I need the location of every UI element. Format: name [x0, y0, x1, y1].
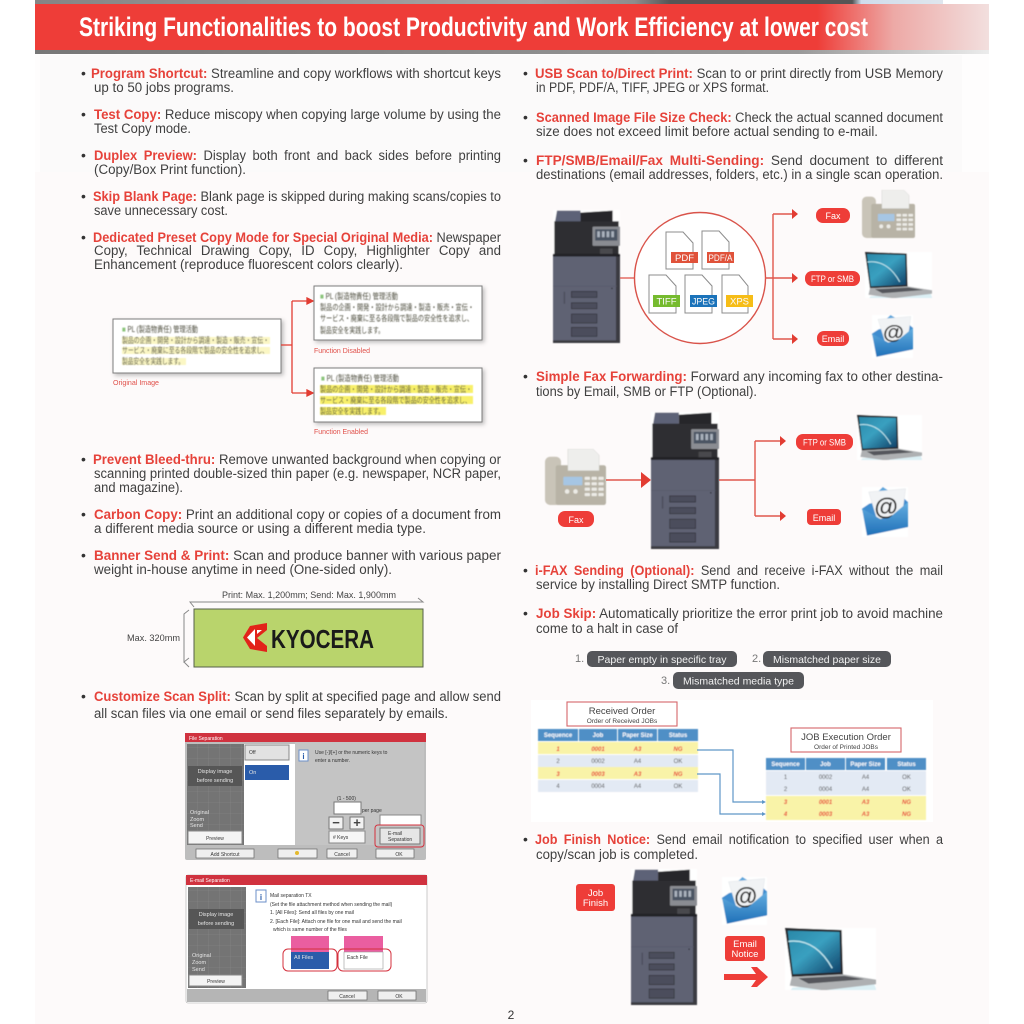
screenshot: file separation — [185, 733, 426, 860]
table: job execution order: A3 — [861, 800, 870, 806]
instructions: i — [260, 893, 262, 902]
feature: scanned image file size — [523, 109, 943, 139]
button bar: Add Shortcut — [211, 852, 240, 858]
preview pane — [187, 744, 244, 845]
preview pane: Original — [190, 810, 209, 816]
feature: customize scan split: Customize Scan Split: Scan by split at specified page and allow send — [94, 689, 501, 704]
feature: usb scan: in PDF, PDF/A, TIFF, JPEG or XPS format. — [536, 80, 769, 95]
feature: usb scan — [523, 65, 943, 95]
table: job execution order: Job — [820, 762, 831, 768]
label: job finish: Job — [588, 888, 603, 899]
settings pane: − — [332, 815, 340, 830]
table: received order: Status — [669, 733, 688, 739]
feature: test copy: Test Copy: Reduce miscopy when copying large volume by using the — [94, 107, 501, 122]
pill: ftp or smb: FTP or SMB — [803, 438, 846, 448]
banner print size label: Print: Max. 1,200mm; Send: Max. 1,900mm — [222, 590, 396, 601]
table: received order: OK — [674, 759, 682, 765]
condition 1 — [575, 651, 737, 667]
table: received order: 0004 — [591, 784, 605, 790]
table: received order: A3 — [633, 772, 642, 778]
feature: program shortcut: Program Shortcut: Streamline and copy workflows with shortcut keys — [91, 66, 501, 81]
table: job execution order: Paper Size — [850, 762, 881, 768]
dimension brackets — [184, 598, 423, 667]
title banner — [35, 0, 989, 54]
feature: simple fax forwarding — [523, 368, 943, 399]
button bar: Cancel — [339, 994, 355, 1000]
instructions — [256, 890, 402, 933]
feature: simple fax forwarding: Simple Fax Forwarding: Forward any incoming fax to other destina- — [536, 369, 943, 384]
feature: test copy: • — [81, 106, 86, 122]
pill: email: Email — [822, 334, 844, 344]
diagram: job finish notice — [576, 866, 880, 1008]
label: received order — [567, 702, 677, 726]
feature: multi-sending: FTP/SMB/Email/Fax Multi-Sending: Send document to different — [536, 153, 943, 168]
table: job execution order: 0001 — [819, 800, 833, 806]
feature: dedicated preset copy mode: Enhancement (reproduce fluorescent colors clearly). — [94, 257, 403, 272]
kyocera logo — [243, 623, 374, 654]
table: received order: OK — [674, 784, 682, 790]
label: job execution order — [791, 728, 901, 752]
feature: dedicated preset copy mode: Copy, Technical Drawing Copy, ID Copy, Highlighter Copy and — [94, 243, 501, 258]
feature: dedicated preset copy mode: • — [81, 229, 86, 245]
on off options: Off — [249, 750, 256, 756]
pill: fax — [558, 511, 594, 527]
feature: scanned image file size: Scanned Image File Size Check: Check the actual scanned document — [536, 110, 943, 125]
icon: laptop — [862, 249, 935, 303]
file icon: TIFF: TIFF — [656, 296, 677, 308]
image box: function enabled: ■ PL (製造物責任) 管理活動 — [321, 373, 399, 383]
feature: i-fax sending: • — [523, 562, 528, 578]
table: job execution order: A3 — [861, 812, 870, 818]
pill: email — [817, 331, 849, 346]
table: job execution order: Status — [897, 762, 916, 768]
caption: function enabled: Function Enabled — [314, 427, 368, 436]
preview pane: Preview — [206, 836, 224, 842]
table: job execution order: 0002 — [819, 775, 833, 781]
pill: email — [807, 509, 841, 525]
image box: original: ■ PL (製造物責任) 管理活動 — [122, 324, 198, 334]
label: job finish — [576, 884, 615, 911]
option buttons — [283, 936, 391, 971]
pill: fax: Fax — [568, 515, 584, 525]
diagram: fluorescent highlight comparison — [113, 286, 482, 436]
feature: job skip: Job Skip: Automatically prioritize the error print job to avoid machine — [536, 606, 943, 621]
diagram: banner size — [127, 590, 423, 667]
connectors between tables — [697, 750, 766, 816]
button bar — [187, 989, 426, 1002]
banner height label: Max. 320mm — [127, 633, 180, 644]
feature: customize scan split: • — [81, 688, 86, 704]
label: job execution order: Order of Printed JOBs — [814, 744, 879, 751]
feature: prevent bleed-thru — [81, 451, 501, 495]
table: received order: NG — [674, 772, 683, 778]
diagram: fax forwarding — [545, 409, 925, 552]
button bar — [196, 849, 414, 858]
file icon: PDF: PDF — [675, 253, 694, 264]
feature: job finish notice: • — [523, 831, 528, 847]
feature: i-fax sending: service by installing Direct SMTP function. — [536, 577, 780, 592]
image box: function enabled: サービス・廃棄に至る各段階で製品の安全性を追求し、 — [320, 395, 471, 405]
feature: dedicated preset copy mode — [81, 229, 501, 272]
caption: function disabled: Function Disabled — [314, 346, 370, 355]
feature: prevent bleed-thru: Prevent Bleed-thru: Remove unwanted background when copying or — [93, 452, 501, 467]
feature: job finish notice: Job Finish Notice: Send email notification to specified user when a — [535, 832, 943, 847]
image box: function enabled — [314, 368, 482, 422]
image box: function enabled: 製品の企画・開発・設計から調達・製造・販売・宣伝・ — [320, 384, 472, 394]
file icon: XPS: XPS — [730, 296, 749, 308]
image box: function disabled: ■ PL (製造物責任) 管理活動 — [320, 291, 398, 301]
feature: i-fax sending: i-FAX Sending (Optional): Send and receive i-FAX without the mail — [535, 563, 943, 578]
table: job execution order: 0004 — [819, 787, 833, 793]
settings pane: i — [302, 752, 305, 761]
label: email notice: Email — [733, 939, 757, 950]
icon: email envelope — [861, 484, 909, 539]
feature: banner send and print: • — [81, 547, 86, 563]
feature: job skip — [523, 605, 943, 636]
right column features — [523, 65, 943, 862]
job order tables — [531, 700, 933, 822]
connector: printer to circle — [620, 277, 635, 279]
feature: customize scan split — [81, 688, 501, 721]
feature: skip blank page: • — [81, 188, 86, 204]
feature: usb scan: • — [523, 65, 528, 81]
screen title: File Separation — [189, 736, 223, 742]
label: email notice: Notice — [732, 949, 758, 960]
feature: banner send and print — [81, 547, 501, 577]
label: email notice — [725, 936, 765, 961]
table: job execution order: 0003 — [819, 812, 833, 818]
table: received order: NG — [674, 747, 683, 753]
feature: duplex preview: Duplex Preview: Display both front and back sides before printing — [94, 148, 501, 163]
feature: carbon copy: Carbon Copy: Print an additional copy or copies of a document from — [94, 507, 501, 522]
feature: program shortcut — [81, 65, 501, 95]
condition 3: Mismatched media type — [683, 676, 794, 688]
feature: program shortcut: up to 50 jobs programs. — [94, 80, 234, 95]
table: job execution order: 4 — [783, 812, 788, 818]
arrows: split — [281, 298, 313, 396]
condition 2: 2. — [752, 653, 761, 665]
feature: banner send and print: weight in-house anytime in need (One-sided only). — [93, 562, 392, 577]
settings pane: (1 - 500) — [337, 796, 356, 802]
icon: laptop — [854, 412, 925, 465]
feature: scanned image file size: size does not exceed limit before actual sending to e-mail. — [536, 124, 878, 139]
pill: ftp or smb — [805, 271, 860, 286]
feature: skip blank page — [81, 188, 501, 218]
icon: fax machine — [862, 190, 915, 238]
image box: original: 製品安全を実践します。 — [122, 356, 184, 366]
table: received order: A4 — [634, 759, 642, 765]
image box: original: サービス・廃棄に至る各段階で製品の安全性を追求し、 — [122, 345, 268, 355]
settings pane — [295, 742, 424, 847]
feature: carbon copy: a different media source or using a different media type. — [94, 521, 426, 536]
pill: ftp or smb — [796, 434, 853, 450]
preview pane: Preview — [207, 979, 225, 985]
feature: multi-sending — [523, 152, 943, 182]
button bar: Cancel — [334, 852, 350, 858]
table: job execution order: OK — [902, 775, 911, 781]
preview pane — [188, 887, 246, 988]
caption: original image: Original Image — [113, 378, 159, 387]
preview pane: Send — [192, 967, 205, 973]
feature: multi-sending: • — [523, 152, 528, 168]
preview pane: Display image — [199, 912, 233, 918]
feature: job finish notice — [523, 831, 943, 862]
feature: job finish notice: copy/scan job is completed. — [536, 847, 698, 862]
icon: laptop — [780, 923, 880, 997]
pill: fax: Fax — [825, 211, 841, 221]
feature: duplex preview: • — [81, 147, 86, 163]
job skip conditions — [575, 651, 891, 689]
preview pane: Display image — [198, 769, 232, 775]
feature: usb scan: USB Scan to/Direct Print: Scan to or print directly from USB Memory — [535, 66, 943, 81]
condition 3: 3. — [661, 675, 670, 687]
feature: i-fax sending — [523, 562, 943, 592]
table: received order: Paper Size — [622, 733, 653, 739]
branching arrows — [719, 436, 786, 521]
label: received order: Order of Received JOBs — [587, 718, 658, 725]
image box: original: 製品の企画・開発・設計から調達・製造・販売・宣伝・ — [122, 335, 269, 345]
feature: simple fax forwarding: • — [523, 368, 528, 384]
table: job execution order: NG — [902, 812, 911, 818]
button bar: OK — [395, 852, 403, 858]
feature: job skip: • — [523, 605, 528, 621]
feature: test copy — [81, 106, 501, 136]
label: job execution order: JOB Execution Order — [801, 732, 891, 743]
table: received order: 1 — [556, 747, 560, 753]
icon: printer — [629, 866, 699, 1008]
image box: function disabled — [314, 286, 482, 340]
screenshot: email separation — [186, 875, 427, 1003]
settings pane: E-mail — [388, 831, 402, 837]
feature: multi-sending: destinations (email addresses, folders, etc.) in a single scan operation. — [536, 167, 943, 182]
image box: original — [113, 319, 281, 373]
feature: dedicated preset copy mode: Dedicated Preset Copy Mode for Special Original Media: Newspaper — [93, 230, 501, 245]
preview pane: Original — [192, 953, 211, 959]
on off options — [244, 744, 296, 845]
image box: function disabled: サービス・廃棄に至る各段階で製品の安全性を追求し、 — [320, 313, 473, 323]
settings pane: per page — [362, 808, 382, 814]
instructions: which is same number of the files — [273, 927, 347, 933]
preview pane: before sending — [198, 921, 234, 927]
settings pane: Use [-]/[+] or the numeric keys to — [315, 750, 388, 756]
table: received order: 2 — [556, 759, 560, 765]
table: received order: 0002 — [591, 759, 605, 765]
feature: customize scan split: all scan files via one email or send files separately by emails. — [94, 706, 448, 721]
feature: skip blank page: save unnecessary cost. — [94, 203, 228, 218]
arrow: fax to printer — [606, 472, 651, 488]
label: received order: Received Order — [589, 706, 655, 717]
table: job execution order — [766, 758, 926, 820]
diagram: scan to multi-send — [551, 190, 935, 359]
banner sheet — [194, 609, 423, 667]
image box: function enabled: 製品安全を実践します。 — [320, 406, 384, 416]
preview pane: Send — [190, 823, 203, 829]
condition 1: Paper empty in specific tray — [598, 654, 727, 666]
instructions: 1. [All Files]: Send all files by one mail — [270, 910, 354, 916]
table: received order: 0001 — [591, 747, 605, 753]
icon: printer — [649, 409, 721, 552]
option buttons: Each File — [347, 955, 368, 961]
feature: skip blank page: Skip Blank Page: Blank page is skipped during making scans/copies to — [93, 189, 501, 204]
settings pane: # Keys — [333, 835, 349, 841]
feature: test copy: Test Copy mode. — [94, 121, 191, 136]
on off options: On — [249, 770, 256, 776]
table: job execution order: NG — [902, 800, 911, 806]
file icon: PDF/A: PDF/A — [708, 253, 733, 264]
pill: email: Email — [813, 513, 835, 523]
feature: duplex preview — [81, 147, 501, 177]
file formats circle — [634, 212, 766, 344]
table: job execution order: Sequence — [771, 762, 800, 768]
kyocera logo: KYOCERA — [271, 624, 374, 654]
condition 2: Mismatched paper size — [773, 654, 881, 666]
condition 2 — [752, 651, 891, 667]
table: received order: 3 — [556, 772, 560, 778]
image box: function disabled: 製品の企画・開発・設計から調達・製造・販売・宣伝・ — [320, 302, 474, 312]
table: job execution order: 3 — [784, 800, 788, 806]
icon: email envelope — [721, 874, 768, 927]
button bar: OK — [395, 994, 403, 1000]
image box: function disabled: 製品安全を実践します。 — [320, 325, 384, 335]
page number: 2 — [508, 1008, 515, 1022]
condition 3 — [661, 672, 804, 689]
feature: program shortcut: • — [81, 65, 86, 81]
feature: banner send and print: Banner Send & Print: Scan and produce banner with various paper — [94, 548, 501, 563]
settings pane: enter a number. — [315, 758, 350, 764]
branching arrows — [765, 209, 798, 344]
instructions: Mail separation TX — [270, 893, 312, 899]
arrow: email notice — [724, 967, 768, 987]
instructions: 2. [Each File]: Attach one file for one mail and send the mail — [270, 919, 402, 925]
icon: fax machine — [545, 449, 606, 505]
table: received order: Sequence — [544, 733, 573, 739]
feature: carbon copy — [81, 506, 501, 536]
table: job execution order: 1 — [784, 775, 788, 781]
preview pane: before sending — [197, 778, 233, 784]
feature: job skip: come to a halt in case of — [536, 621, 678, 636]
table: job execution order: A4 — [862, 775, 870, 781]
table: received order: 0003 — [591, 772, 605, 778]
table: received order: A3 — [633, 747, 642, 753]
file icon: JPEG: JPEG — [692, 296, 715, 308]
instructions: (Set the file attachment method when sending the mail) — [270, 902, 393, 908]
feature: prevent bleed-thru: and magazine). — [94, 480, 183, 495]
feature: scanned image file size: • — [523, 109, 528, 125]
feature: prevent bleed-thru: scanning printed double-sized thin paper (e.g. newspaper, NCR paper, — [94, 466, 501, 481]
preview pane: Zoom — [190, 817, 204, 823]
table: job execution order: 2 — [784, 787, 788, 793]
preview pane: Zoom — [192, 960, 206, 966]
table: job execution order: OK — [902, 787, 911, 793]
feature: duplex preview: (Copy/Box Print function). — [94, 162, 246, 177]
condition 1: 1. — [575, 653, 584, 665]
table: received order: Job — [593, 733, 604, 739]
pill: ftp or smb: FTP or SMB — [811, 274, 854, 284]
table: job execution order: A4 — [862, 787, 870, 793]
feature: prevent bleed-thru: • — [81, 451, 86, 467]
icon: printer — [551, 207, 622, 346]
table: received order: 4 — [556, 784, 560, 790]
feature: carbon copy: • — [81, 506, 86, 522]
label: job finish: Finish — [583, 898, 608, 909]
settings pane: + — [353, 815, 361, 830]
table: received order: A4 — [634, 784, 642, 790]
feature: simple fax forwarding: tions by Email, SMB or FTP (Optional). — [536, 384, 757, 399]
table: received order — [538, 729, 698, 792]
pill: fax — [816, 208, 850, 223]
icon: email envelope — [871, 312, 914, 359]
settings pane: Separation — [388, 837, 412, 843]
screen title: E-mail Separation — [190, 878, 230, 884]
left column features — [81, 65, 501, 721]
option buttons: All Files — [294, 955, 314, 961]
